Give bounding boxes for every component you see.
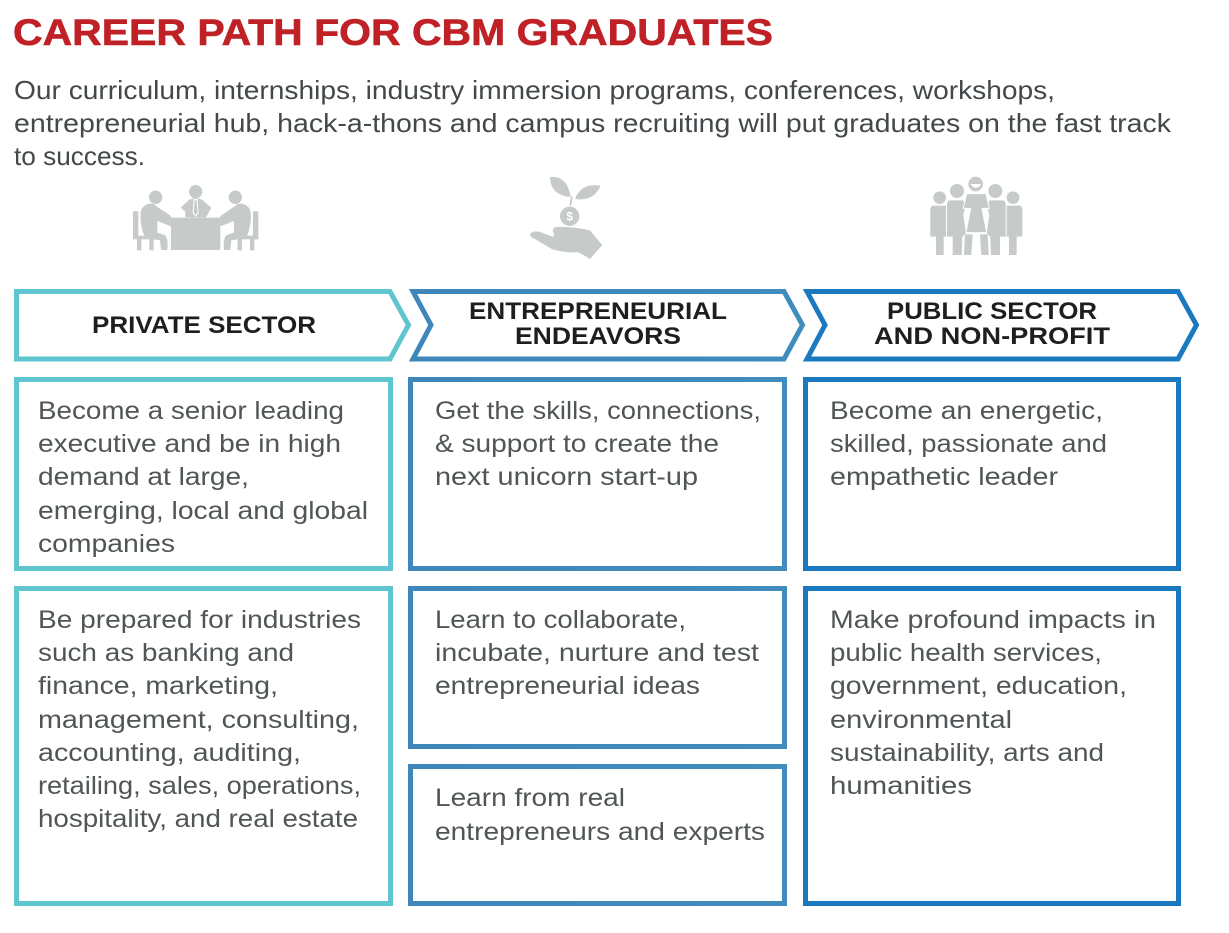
panel: private sector industries: management, consulting,: [38, 706, 359, 734]
header: public sector and non-profit: [807, 292, 1196, 359]
panel: public sector leader: [806, 380, 1178, 568]
header: public sector and non-profit: PUBLIC SECTOR: [887, 298, 1097, 325]
panel: private sector industries: [16, 588, 390, 904]
header: entrepreneurial endeavors: ENTREPRENEURIAL: [469, 298, 727, 325]
panel: entrepreneurial skills: Get the skills, connections,: [435, 397, 761, 425]
panel: entrepreneurial collaboration: Learn to collaborate,: [435, 606, 686, 634]
header: entrepreneurial endeavors: [413, 292, 802, 359]
panel: entrepreneurial collaboration: entrepreneurial ideas: [435, 672, 700, 700]
header: public sector and non-profit: AND NON-PROFIT: [874, 323, 1110, 350]
panel: private sector industries: Be prepared for industries: [38, 606, 361, 634]
panel: private sector industries: retailing, sales, operations,: [38, 772, 361, 800]
intro paragraph: entrepreneurial hub, hack-a-thons and campus recruiting will put graduates on the fast track: [14, 108, 1172, 138]
panel: private sector executive: demand at large,: [38, 463, 249, 491]
panel: private sector industries: such as banking and: [38, 639, 294, 667]
panel: public sector impact: public health services,: [830, 639, 1102, 667]
header: private sector: [16, 292, 408, 359]
panel: private sector industries: hospitality, and real estate: [38, 805, 358, 833]
panel: public sector leader: empathetic leader: [830, 463, 1058, 491]
panel: entrepreneurial skills: & support to create the: [435, 430, 719, 458]
panel: public sector impact: sustainability, arts and: [830, 739, 1104, 767]
icon: hand holding coin and sprout: [530, 177, 602, 259]
panel: private sector industries: accounting, auditing,: [38, 739, 301, 767]
panel: public sector impact: government, education,: [830, 672, 1127, 700]
panel: public sector impact: environmental: [830, 706, 1012, 734]
header: entrepreneurial endeavors: ENDEAVORS: [515, 323, 681, 350]
panel: private sector executive: emerging, local and global: [38, 497, 368, 525]
icon: business meeting: [133, 185, 258, 250]
panel: private sector executive: [16, 380, 390, 568]
title: CAREER PATH FOR CBM GRADUATES: [13, 11, 773, 53]
panel: private sector executive: companies: [38, 530, 175, 558]
panel: entrepreneurial skills: [410, 380, 784, 568]
panel: public sector leader: Become an energetic,: [830, 397, 1103, 425]
panel: public sector impact: humanities: [830, 772, 972, 800]
panel: entrepreneurial experts: [410, 766, 784, 904]
panel: entrepreneurial experts: Learn from real: [435, 784, 625, 812]
icon: hand holding coin and sprout: $: [566, 210, 573, 224]
panel: private sector executive: Become a senior leading: [38, 397, 344, 425]
panel: entrepreneurial experts: entrepreneurs and experts: [435, 818, 765, 846]
intro paragraph: Our curriculum, internships, industry immersion programs, conferences, workshops,: [14, 75, 1055, 105]
panel: entrepreneurial collaboration: incubate, nurture and test: [435, 639, 759, 667]
panel: entrepreneurial skills: next unicorn start-up: [435, 463, 698, 491]
header: private sector: PRIVATE SECTOR: [92, 312, 316, 339]
panel: private sector industries: finance, marketing,: [38, 672, 278, 700]
icon: group of people: [930, 177, 1022, 255]
panel: public sector impact: Make profound impacts in: [830, 606, 1156, 634]
panel: entrepreneurial collaboration: [410, 588, 784, 746]
intro paragraph: to success.: [14, 141, 145, 171]
panel: public sector leader: skilled, passionate and: [830, 430, 1107, 458]
intro paragraph: [14, 75, 1172, 171]
panel: public sector impact: [806, 588, 1178, 904]
panel: private sector executive: executive and be in high: [38, 430, 341, 458]
